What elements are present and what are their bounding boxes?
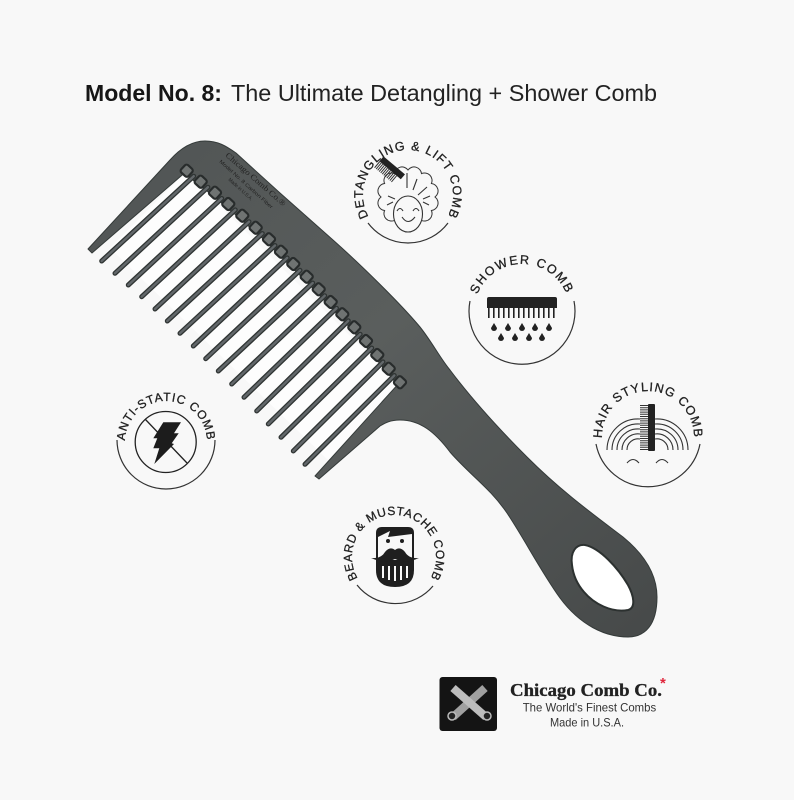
- hair styling label: HAIR STYLING COMB: [593, 382, 703, 438]
- tooth slot heads: [180, 164, 407, 389]
- shower label: SHOWER COMB: [470, 255, 573, 294]
- comb engraving: Chicago Comb Co.®: [224, 151, 288, 208]
- handle hole: [572, 545, 633, 611]
- icon: hair styling comb: [593, 382, 703, 488]
- title: Model No. 8:: [85, 80, 222, 106]
- anti-static arc: [117, 440, 215, 489]
- prohibited circle: [135, 412, 196, 472]
- comb slots backing: [110, 172, 398, 462]
- small comb: [377, 156, 405, 182]
- detangling label: DETANGLING & LIFT COMB: [354, 142, 462, 220]
- comb glyph: [487, 297, 557, 313]
- title: The Ultimate Detangling + Shower Comb: [231, 80, 657, 106]
- icon: anti-static comb: [116, 392, 216, 490]
- hair cloud: [378, 167, 438, 221]
- icon: beard and mustache comb: [344, 506, 444, 604]
- beard label: BEARD & MUSTACHE COMB: [344, 506, 444, 582]
- logo wordmark: Chicago Comb Co.: [510, 680, 662, 700]
- anti-static label: ANTI-STATIC COMB: [116, 392, 215, 441]
- comb engraving: Made in U.S.A.: [227, 177, 254, 202]
- logo tagline: The World's Finest Combs: [523, 700, 656, 714]
- comb engraving: Model No. 8 Carbon Fiber: [218, 159, 274, 211]
- teeth outline: [102, 176, 394, 464]
- eyes: [627, 460, 668, 463]
- hair styling arc: [596, 444, 700, 487]
- vertical comb: [644, 404, 655, 451]
- logo badge: [440, 677, 497, 731]
- shower arc: [469, 301, 575, 364]
- comb body and handle: [88, 141, 657, 637]
- logo origin: Made in U.S.A.: [550, 716, 624, 730]
- icon: detangling and lift comb: [354, 142, 462, 244]
- comb engraving: [218, 151, 288, 211]
- beard arc: [357, 585, 433, 604]
- detangling arc: [368, 223, 448, 243]
- smiling face: [387, 173, 430, 232]
- teeth highlight: [102, 176, 394, 464]
- icon: shower comb: [468, 255, 576, 365]
- lightning bolt: [153, 422, 181, 464]
- comb photograph: [88, 141, 657, 637]
- logo: chicago comb co: [440, 675, 666, 731]
- water drops: [491, 323, 552, 341]
- bearded face: [371, 527, 419, 587]
- hair arches: [607, 419, 688, 450]
- logo star: *: [660, 675, 666, 692]
